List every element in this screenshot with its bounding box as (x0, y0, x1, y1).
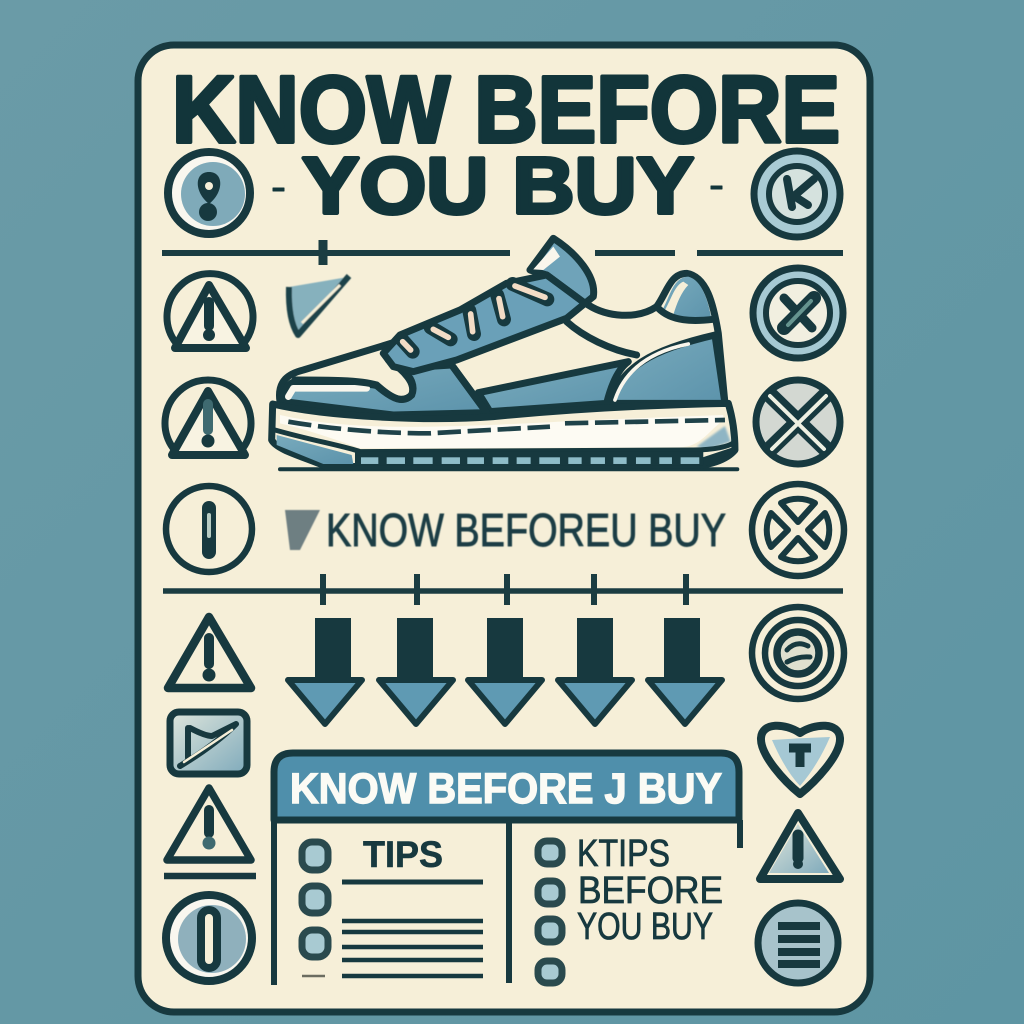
arrow 1 (288, 618, 362, 724)
left icons (164, 152, 256, 981)
icon: check box (170, 712, 247, 774)
bottom left divider (164, 873, 256, 879)
middle divider with ticks (163, 574, 843, 605)
shoe quarter and toe blue (283, 365, 487, 415)
shoe stitching (288, 420, 725, 433)
shoe mid wedge (478, 362, 628, 412)
icon: check mark (289, 276, 349, 335)
shoe lace panel (383, 275, 585, 372)
icon: concentric rings (752, 607, 844, 699)
icon: menu badge (758, 903, 838, 983)
panel: poster card (138, 45, 870, 1012)
title (172, 57, 840, 230)
icon: warning in circle (165, 380, 251, 455)
bullets (538, 841, 562, 983)
right column text: BEFORE (578, 870, 723, 912)
tips heading: TIPS (363, 834, 443, 875)
arrows row (288, 618, 722, 724)
icon: K badge (754, 151, 840, 237)
title: KNOW BEFORE (172, 57, 840, 163)
icon: warning triangle (167, 788, 251, 860)
icon: pill badge (166, 895, 252, 981)
shoe heel tab (662, 277, 712, 321)
arrow 2 (379, 618, 453, 724)
panel: tips table (274, 753, 740, 985)
shoe illustration (272, 238, 737, 469)
table header: KNOW BEFORE J BUY (290, 765, 722, 813)
bullets (302, 842, 328, 957)
icon: X badge (753, 268, 843, 358)
tips column right (538, 833, 723, 983)
top divider (162, 240, 843, 265)
shoe tongue (530, 238, 594, 303)
tips column left (302, 834, 483, 976)
icon: quartered circle (752, 484, 844, 576)
shoe sole toe accent (277, 435, 353, 464)
shoe tread (275, 430, 735, 452)
table frame (274, 820, 740, 985)
right icons (752, 151, 844, 983)
text lines (302, 882, 483, 976)
icon: T shield (761, 726, 840, 794)
arrow 4 (558, 618, 632, 724)
right column text: KTIPS (577, 833, 670, 875)
shoe heel counter (608, 335, 725, 403)
shoe upper (279, 273, 725, 417)
icon: crossed circle (756, 380, 840, 464)
right column text: YOU BUY (577, 906, 713, 948)
shoe collar line (567, 322, 637, 355)
right column text (577, 833, 723, 948)
icon: warning triangle (168, 617, 251, 688)
icon: question badge (168, 152, 250, 234)
shoe laces (402, 284, 547, 352)
shoe sole (272, 403, 735, 467)
shoe sole heel accent (697, 426, 731, 450)
icon: warning badge (760, 813, 840, 879)
title: YOU BUY (302, 141, 694, 230)
icon: warning in circle (167, 274, 253, 348)
table header (274, 753, 739, 820)
arrow 5 (648, 618, 722, 724)
shoe ground shadow (280, 463, 737, 475)
arrow 3 (468, 618, 542, 724)
icon: exclamation circle (166, 486, 252, 572)
middle tagline: KNOW BEFOREU BUY (326, 504, 726, 556)
